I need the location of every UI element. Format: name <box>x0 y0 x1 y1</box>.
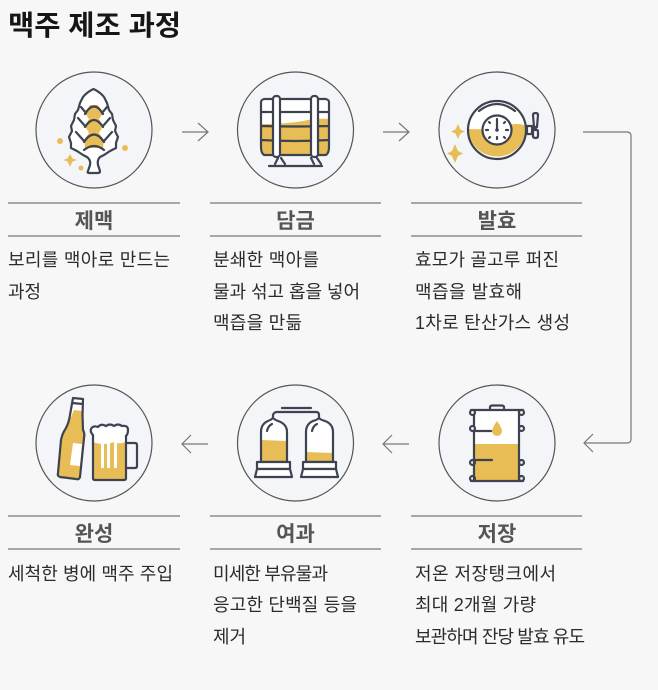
heading: 여과 <box>276 523 315 546</box>
panel: 제맥 <box>8 72 180 302</box>
icon: filter tanks <box>238 385 354 501</box>
rule lines <box>8 516 180 549</box>
heading: 제맥 <box>75 210 113 233</box>
title: 맥주 제조 과정 <box>8 10 181 41</box>
rule lines <box>210 516 381 549</box>
heading: 발효 <box>478 210 516 233</box>
panel: 담금 <box>210 72 381 333</box>
panel: 여과 <box>210 385 381 647</box>
icon: storage tank <box>439 385 555 501</box>
text block <box>415 250 570 333</box>
text block: 1차로 탄산가스 생성 <box>415 313 570 333</box>
text block: 맥즙을 만듦 <box>213 313 302 333</box>
text block <box>213 564 357 647</box>
text block: 응고한 단백질 등을 <box>213 595 357 615</box>
arrow <box>383 435 409 453</box>
text block: 세척한 병에 맥주 주입 <box>8 564 173 584</box>
panel: 저장 <box>411 385 585 647</box>
arrow <box>182 123 208 141</box>
heading: 완성 <box>75 523 113 546</box>
arrow <box>383 123 409 141</box>
icon: beer bottle and mug <box>36 385 152 501</box>
arrow: connector <box>583 132 631 452</box>
icon: fermentation tank gauge <box>439 72 555 188</box>
text block: 분쇄한 맥아를 <box>213 250 319 270</box>
text block: 보관하며 잔당 발효 유도 <box>415 627 585 647</box>
text block: 저온 저장탱크에서 <box>415 564 556 584</box>
text block: 최대 2개월 가량 <box>415 595 536 615</box>
rule lines <box>411 516 582 549</box>
text block: 물과 섞고 홉을 넣어 <box>213 282 360 302</box>
text block <box>415 564 585 647</box>
text block: 효모가 골고루 퍼진 <box>415 250 559 270</box>
text block: 맥즙을 발효해 <box>415 282 522 302</box>
icon: barrel <box>238 72 354 188</box>
panel: 발효 <box>411 72 582 333</box>
arrow <box>182 435 208 453</box>
heading: 저장 <box>478 523 516 546</box>
text block <box>213 250 360 333</box>
text block <box>8 250 170 302</box>
rule lines <box>411 203 582 236</box>
rule lines <box>210 203 381 236</box>
text block: 미세한 부유물과 <box>213 564 328 584</box>
rule lines <box>8 203 180 236</box>
heading: 담금 <box>276 210 315 233</box>
text block: 제거 <box>213 627 246 647</box>
icon: hop <box>36 72 152 188</box>
text block: 과정 <box>8 282 41 302</box>
panel: 완성 <box>8 385 180 584</box>
text block: 보리를 맥아로 만드는 <box>8 250 170 270</box>
